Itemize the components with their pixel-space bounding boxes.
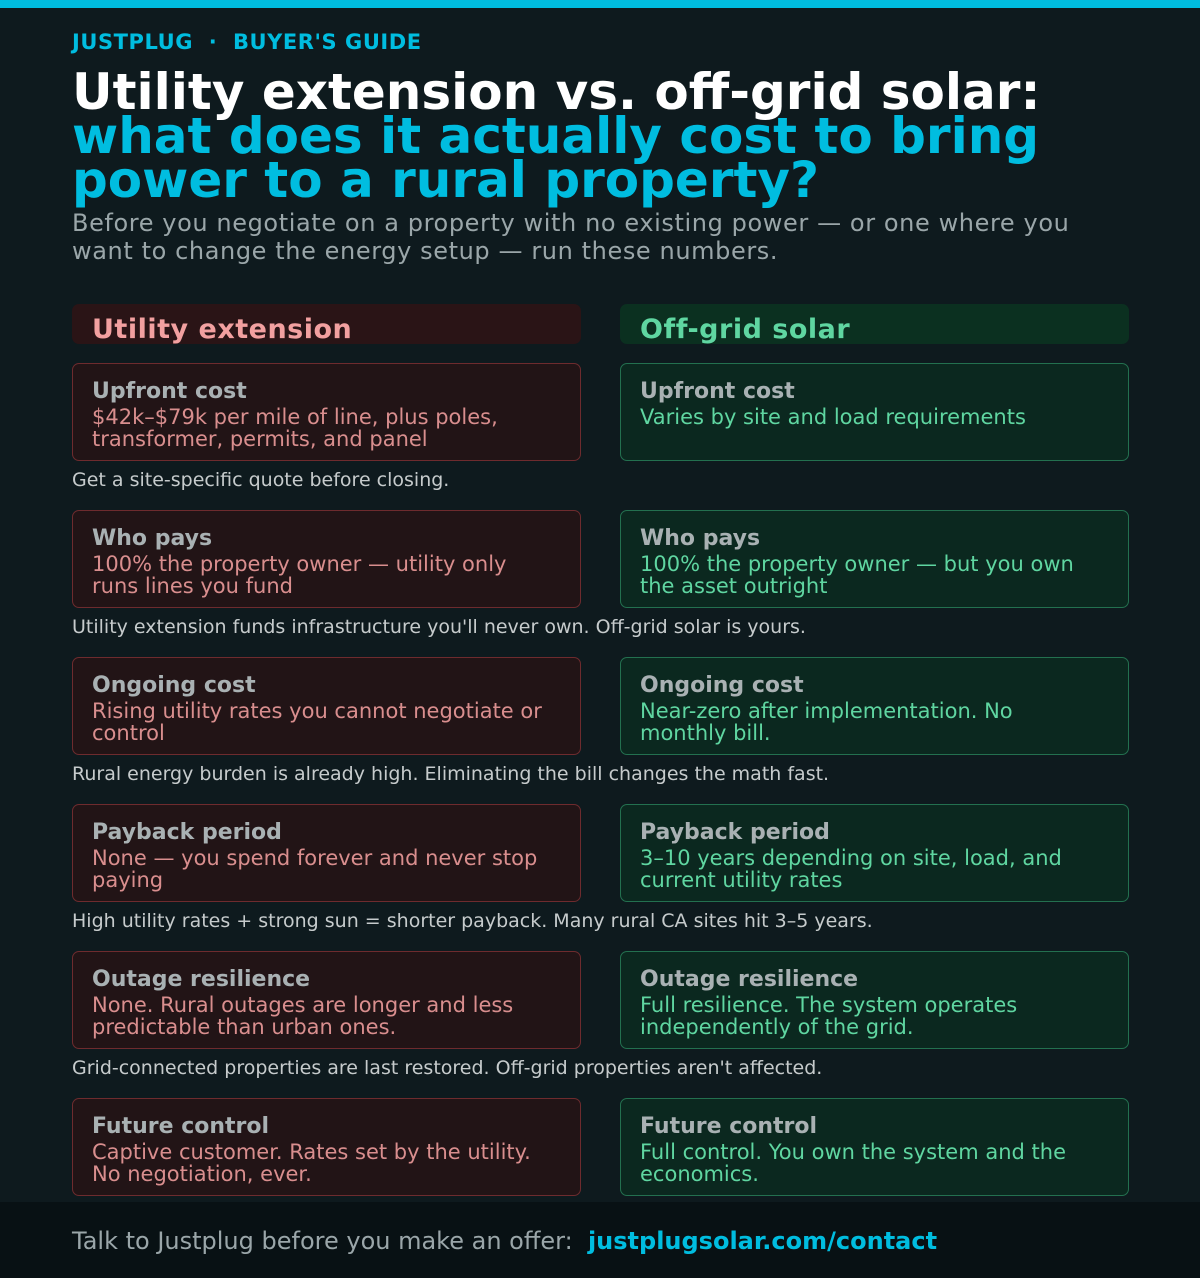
card: solar upfront: Varies by site and load requirements	[640, 405, 1026, 429]
note 4: High utility rates + strong sun = shorter payback. Many rural CA sites hit 3–5 years.	[72, 910, 873, 932]
card: utility future	[72, 1098, 581, 1196]
card: solar who pays: 100% the property owner — but you own the asset outright	[640, 552, 1074, 598]
card: solar who pays	[620, 510, 1129, 608]
card: solar future	[620, 1098, 1129, 1196]
title: Utility extension vs. off-grid solar:	[72, 63, 1040, 121]
card: utility future: Captive customer. Rates set by the utility. No negotiation, ever.	[92, 1140, 531, 1186]
card: solar upfront	[620, 363, 1129, 461]
card: solar upfront: Upfront cost	[640, 379, 795, 404]
card: utility outage: None. Rural outages are longer and less predictable than urban ones.	[92, 993, 513, 1039]
card: utility ongoing: Rising utility rates you cannot negotiate or control	[92, 699, 542, 745]
card: solar outage: Full resilience. The system operates independently of the grid.	[640, 993, 1017, 1039]
card: utility ongoing: Ongoing cost	[92, 673, 256, 698]
card: utility payback	[72, 804, 581, 902]
card: solar who pays: Who pays	[640, 526, 760, 551]
note 1: Get a site-specific quote before closing.	[72, 469, 449, 491]
header: solar	[620, 304, 1129, 344]
card: solar future: Future control	[640, 1114, 817, 1139]
title: what does it actually cost to bring	[72, 107, 1039, 165]
footer: Talk to Justplug before you make an offer: justplugsolar.com/contact	[72, 1227, 937, 1255]
card: solar ongoing	[620, 657, 1129, 755]
card: solar outage	[620, 951, 1129, 1049]
card: solar ongoing: Ongoing cost	[640, 673, 804, 698]
card: utility payback: None — you spend forever and never stop paying	[92, 846, 537, 892]
note 3: Rural energy burden is already high. Eliminating the bill changes the math fast.	[72, 763, 829, 785]
card: utility ongoing	[72, 657, 581, 755]
eyebrow: JUSTPLUG · BUYER'S GUIDE	[72, 30, 422, 54]
card: utility who pays: 100% the property owner — utility only runs lines you fund	[92, 552, 506, 598]
card: utility outage: Outage resilience	[92, 967, 310, 992]
card: solar payback: Payback period	[640, 820, 830, 845]
card: utility upfront	[72, 363, 581, 461]
card: solar future: Full control. You own the system and the economics.	[640, 1140, 1066, 1186]
footer	[0, 1202, 1200, 1278]
card: solar payback	[620, 804, 1129, 902]
card: utility who pays: Who pays	[92, 526, 212, 551]
header: utility: Utility extension	[92, 314, 352, 345]
note 5: Grid-connected properties are last restored. Off-grid properties aren't affected.	[72, 1057, 822, 1079]
header: solar: Off-grid solar	[640, 314, 850, 345]
title	[72, 63, 1040, 209]
card: utility payback: Payback period	[92, 820, 282, 845]
note 2: Utility extension funds infrastructure you'll never own. Off-grid solar is yours.	[72, 616, 806, 638]
card: utility upfront: $42k–$79k per mile of line, plus poles, transformer, permits, and panel	[92, 405, 498, 451]
card: solar outage: Outage resilience	[640, 967, 858, 992]
card: utility upfront: Upfront cost	[92, 379, 247, 404]
card: utility future: Future control	[92, 1114, 269, 1139]
card: solar ongoing: Near-zero after implementation. No monthly bill.	[640, 699, 1013, 745]
header: utility	[72, 304, 581, 344]
top bar	[0, 0, 1200, 8]
subtitle: Before you negotiate on a property with no existing power — or one where you want to change the energy setup — run these numbers.	[72, 209, 1069, 265]
card: utility who pays	[72, 510, 581, 608]
title: power to a rural property?	[72, 151, 819, 209]
card: solar payback: 3–10 years depending on site, load, and current utility rates	[640, 846, 1062, 892]
card: utility outage	[72, 951, 581, 1049]
